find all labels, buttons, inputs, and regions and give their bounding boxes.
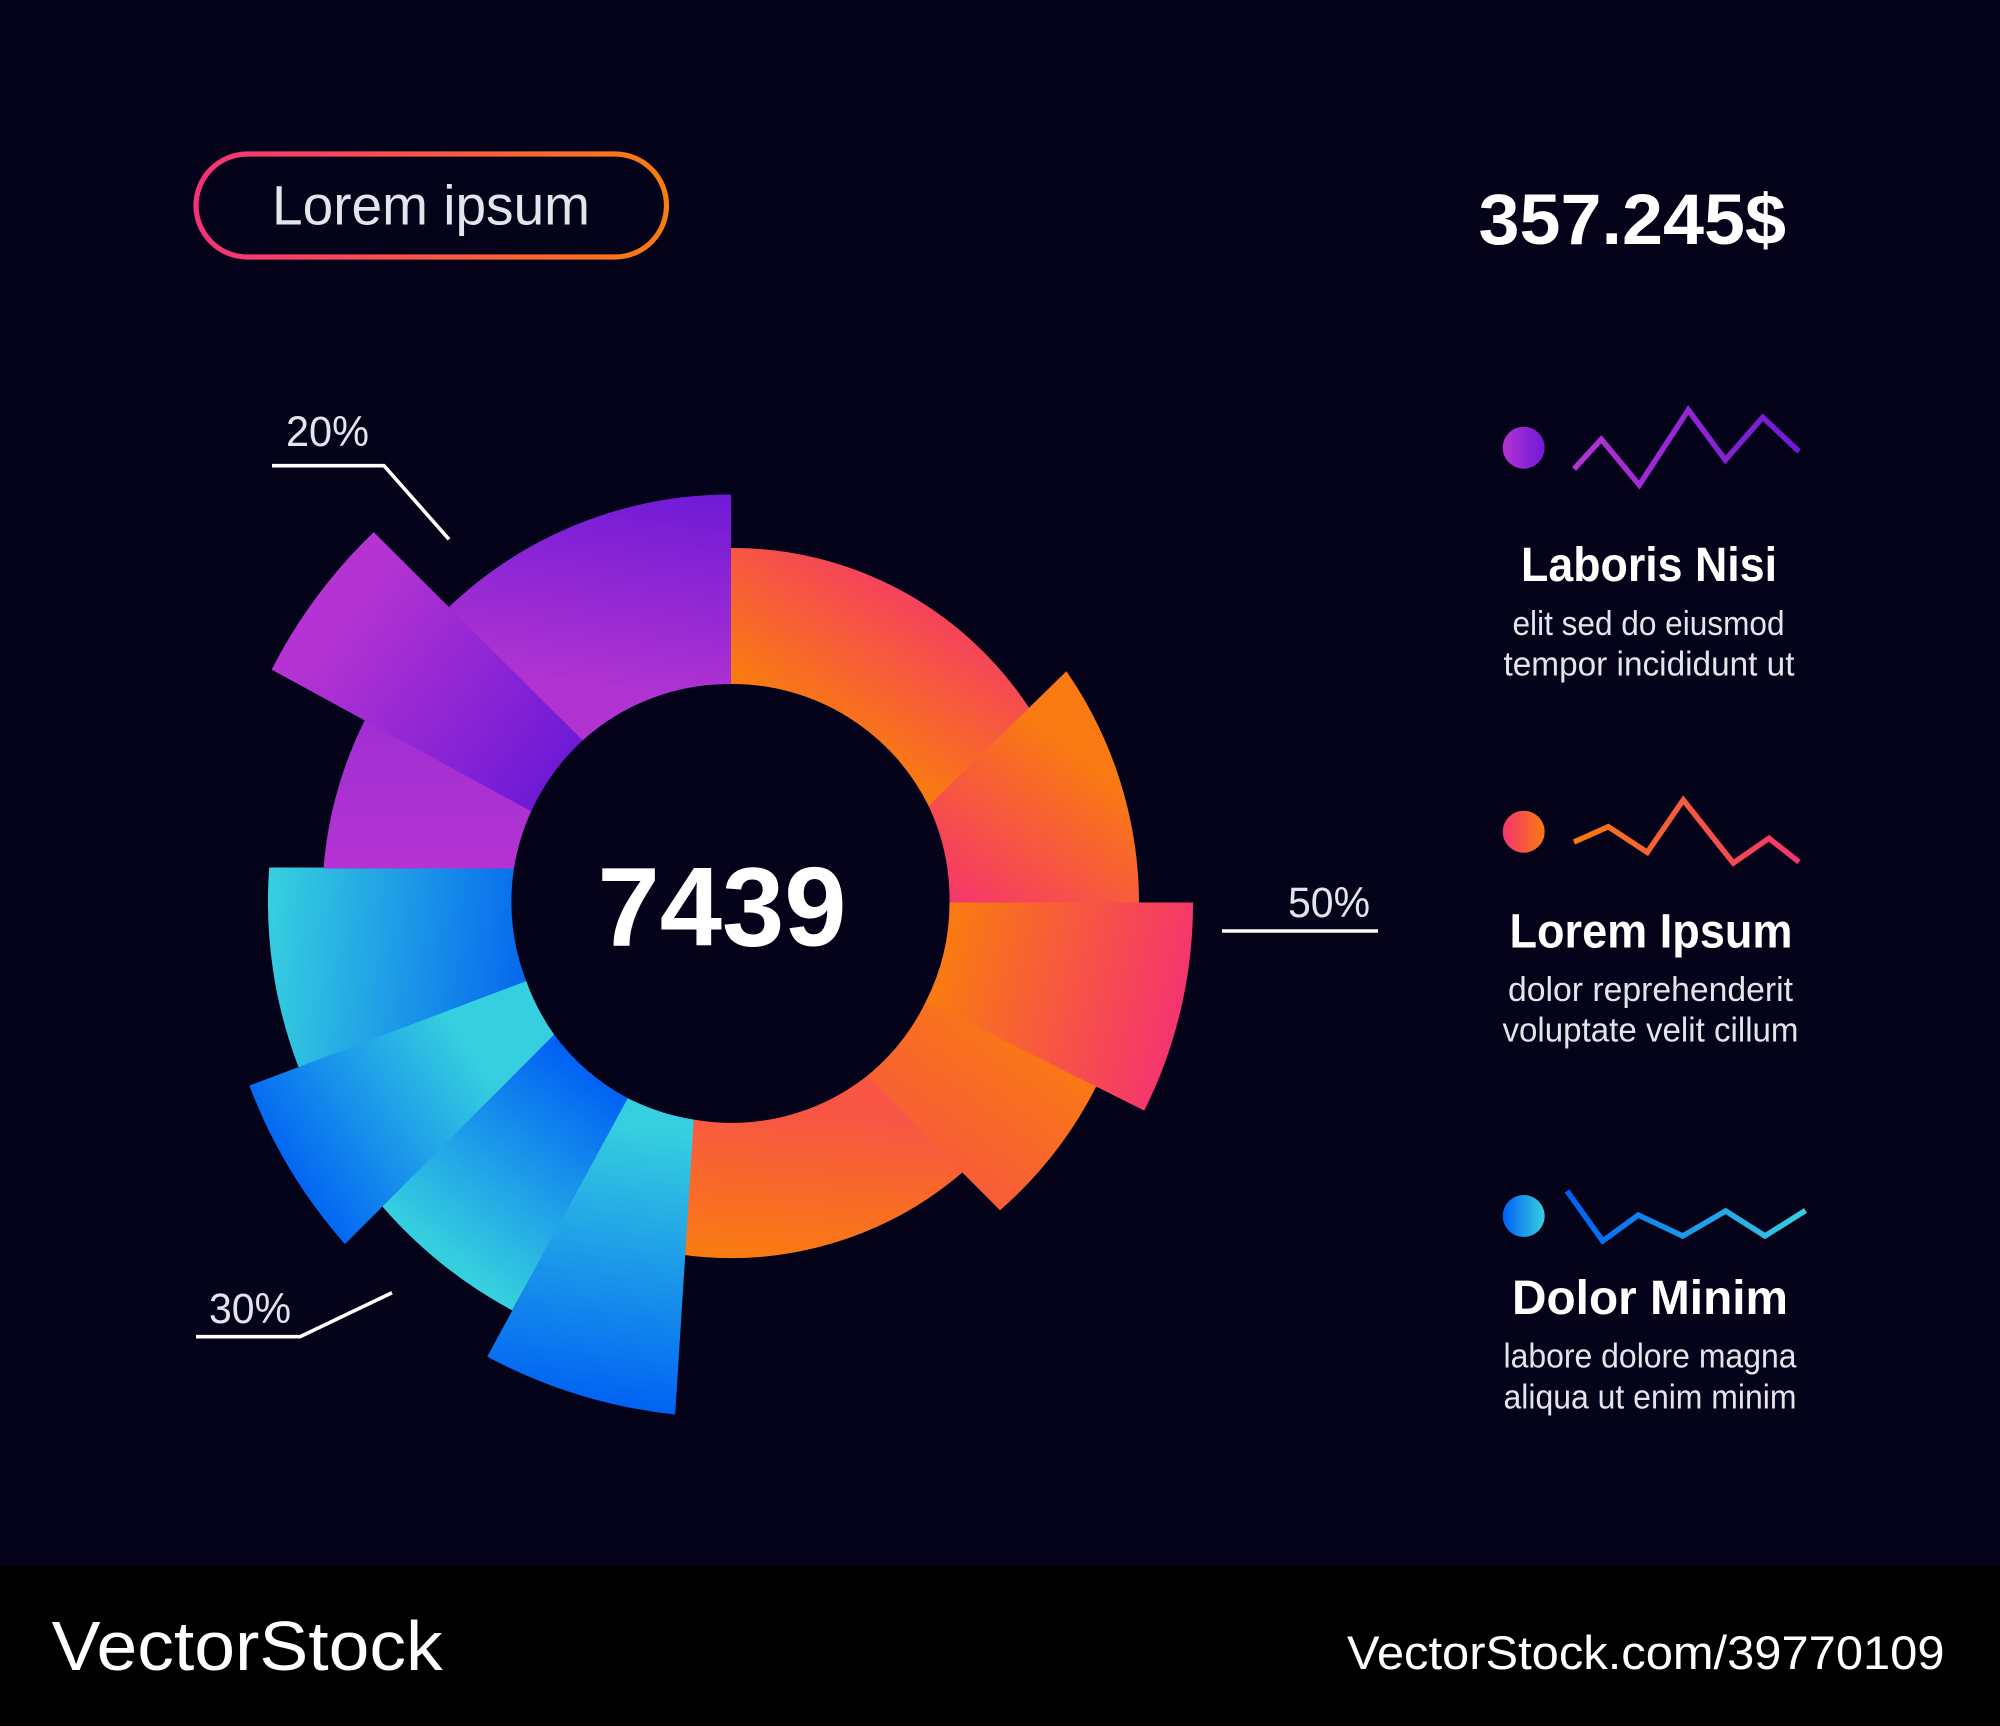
value: 20%: [286, 408, 369, 456]
footer brand: VectorStock: [52, 1607, 444, 1685]
sector: orange top right: [730, 548, 1029, 806]
sparkline: blue: [1567, 1191, 1806, 1241]
sector: blue left long: [250, 982, 554, 1243]
legend text line 2: voluptate velit cillum: [1502, 1012, 1798, 1050]
value: 50%: [1288, 879, 1370, 927]
leader line: [196, 1293, 392, 1337]
legend text line 1: elit sed do eiusmod: [1512, 605, 1784, 643]
legend title: Laboris Nisi: [1521, 539, 1777, 592]
sector: cyan left: [268, 868, 526, 1067]
pill label: Lorem ipsum: [272, 174, 590, 237]
legend: Dolor Minim: [1503, 1191, 1806, 1416]
footer bar: [0, 1566, 2000, 1726]
center value: 7439: [598, 844, 846, 970]
total amount: 357.245$: [1478, 181, 1786, 260]
sector: orange bottom: [685, 1076, 962, 1258]
sector: purple upper left long: [272, 533, 582, 811]
legend: Laboris Nisi: [1503, 410, 1799, 683]
value: 30%: [209, 1285, 291, 1333]
sector: purple left: [324, 720, 531, 868]
legend text line 1: labore dolore magna: [1504, 1337, 1797, 1375]
footer background: [0, 1566, 2000, 1726]
legend text line 2: aliqua ut enim minim: [1504, 1378, 1796, 1416]
footer url: VectorStock.com/39770109: [1347, 1626, 1944, 1679]
leader line: [1222, 929, 1378, 933]
sector: purple top: [450, 495, 730, 740]
legend text line 1: dolor reprehenderit: [1508, 971, 1794, 1009]
legend text line 2: tempor incididunt ut: [1504, 645, 1795, 683]
callout: 30%: [196, 1285, 392, 1337]
sector: orange upper right: [929, 672, 1138, 903]
leader line: [272, 466, 449, 539]
sector: blue lower left: [383, 1034, 628, 1310]
legend title: Lorem Ipsum: [1510, 906, 1792, 958]
legend: Lorem Ipsum: [1502, 800, 1799, 1050]
icon: purple dot: [1503, 427, 1545, 469]
heading pill: [196, 154, 666, 257]
icon: blue dot: [1503, 1195, 1545, 1237]
sparkline: purple: [1574, 410, 1799, 485]
sector: orange right long: [927, 903, 1193, 1110]
sector: orange lower right: [867, 1001, 1096, 1210]
sparkline: orange: [1574, 800, 1799, 863]
icon: orange dot: [1503, 811, 1545, 853]
callout: 20%: [272, 408, 449, 539]
radial segmented chart: [250, 495, 1193, 1414]
sector: blue bottom long: [488, 1099, 693, 1414]
legend title: Dolor Minim: [1512, 1272, 1788, 1325]
pill outline: [196, 154, 666, 257]
